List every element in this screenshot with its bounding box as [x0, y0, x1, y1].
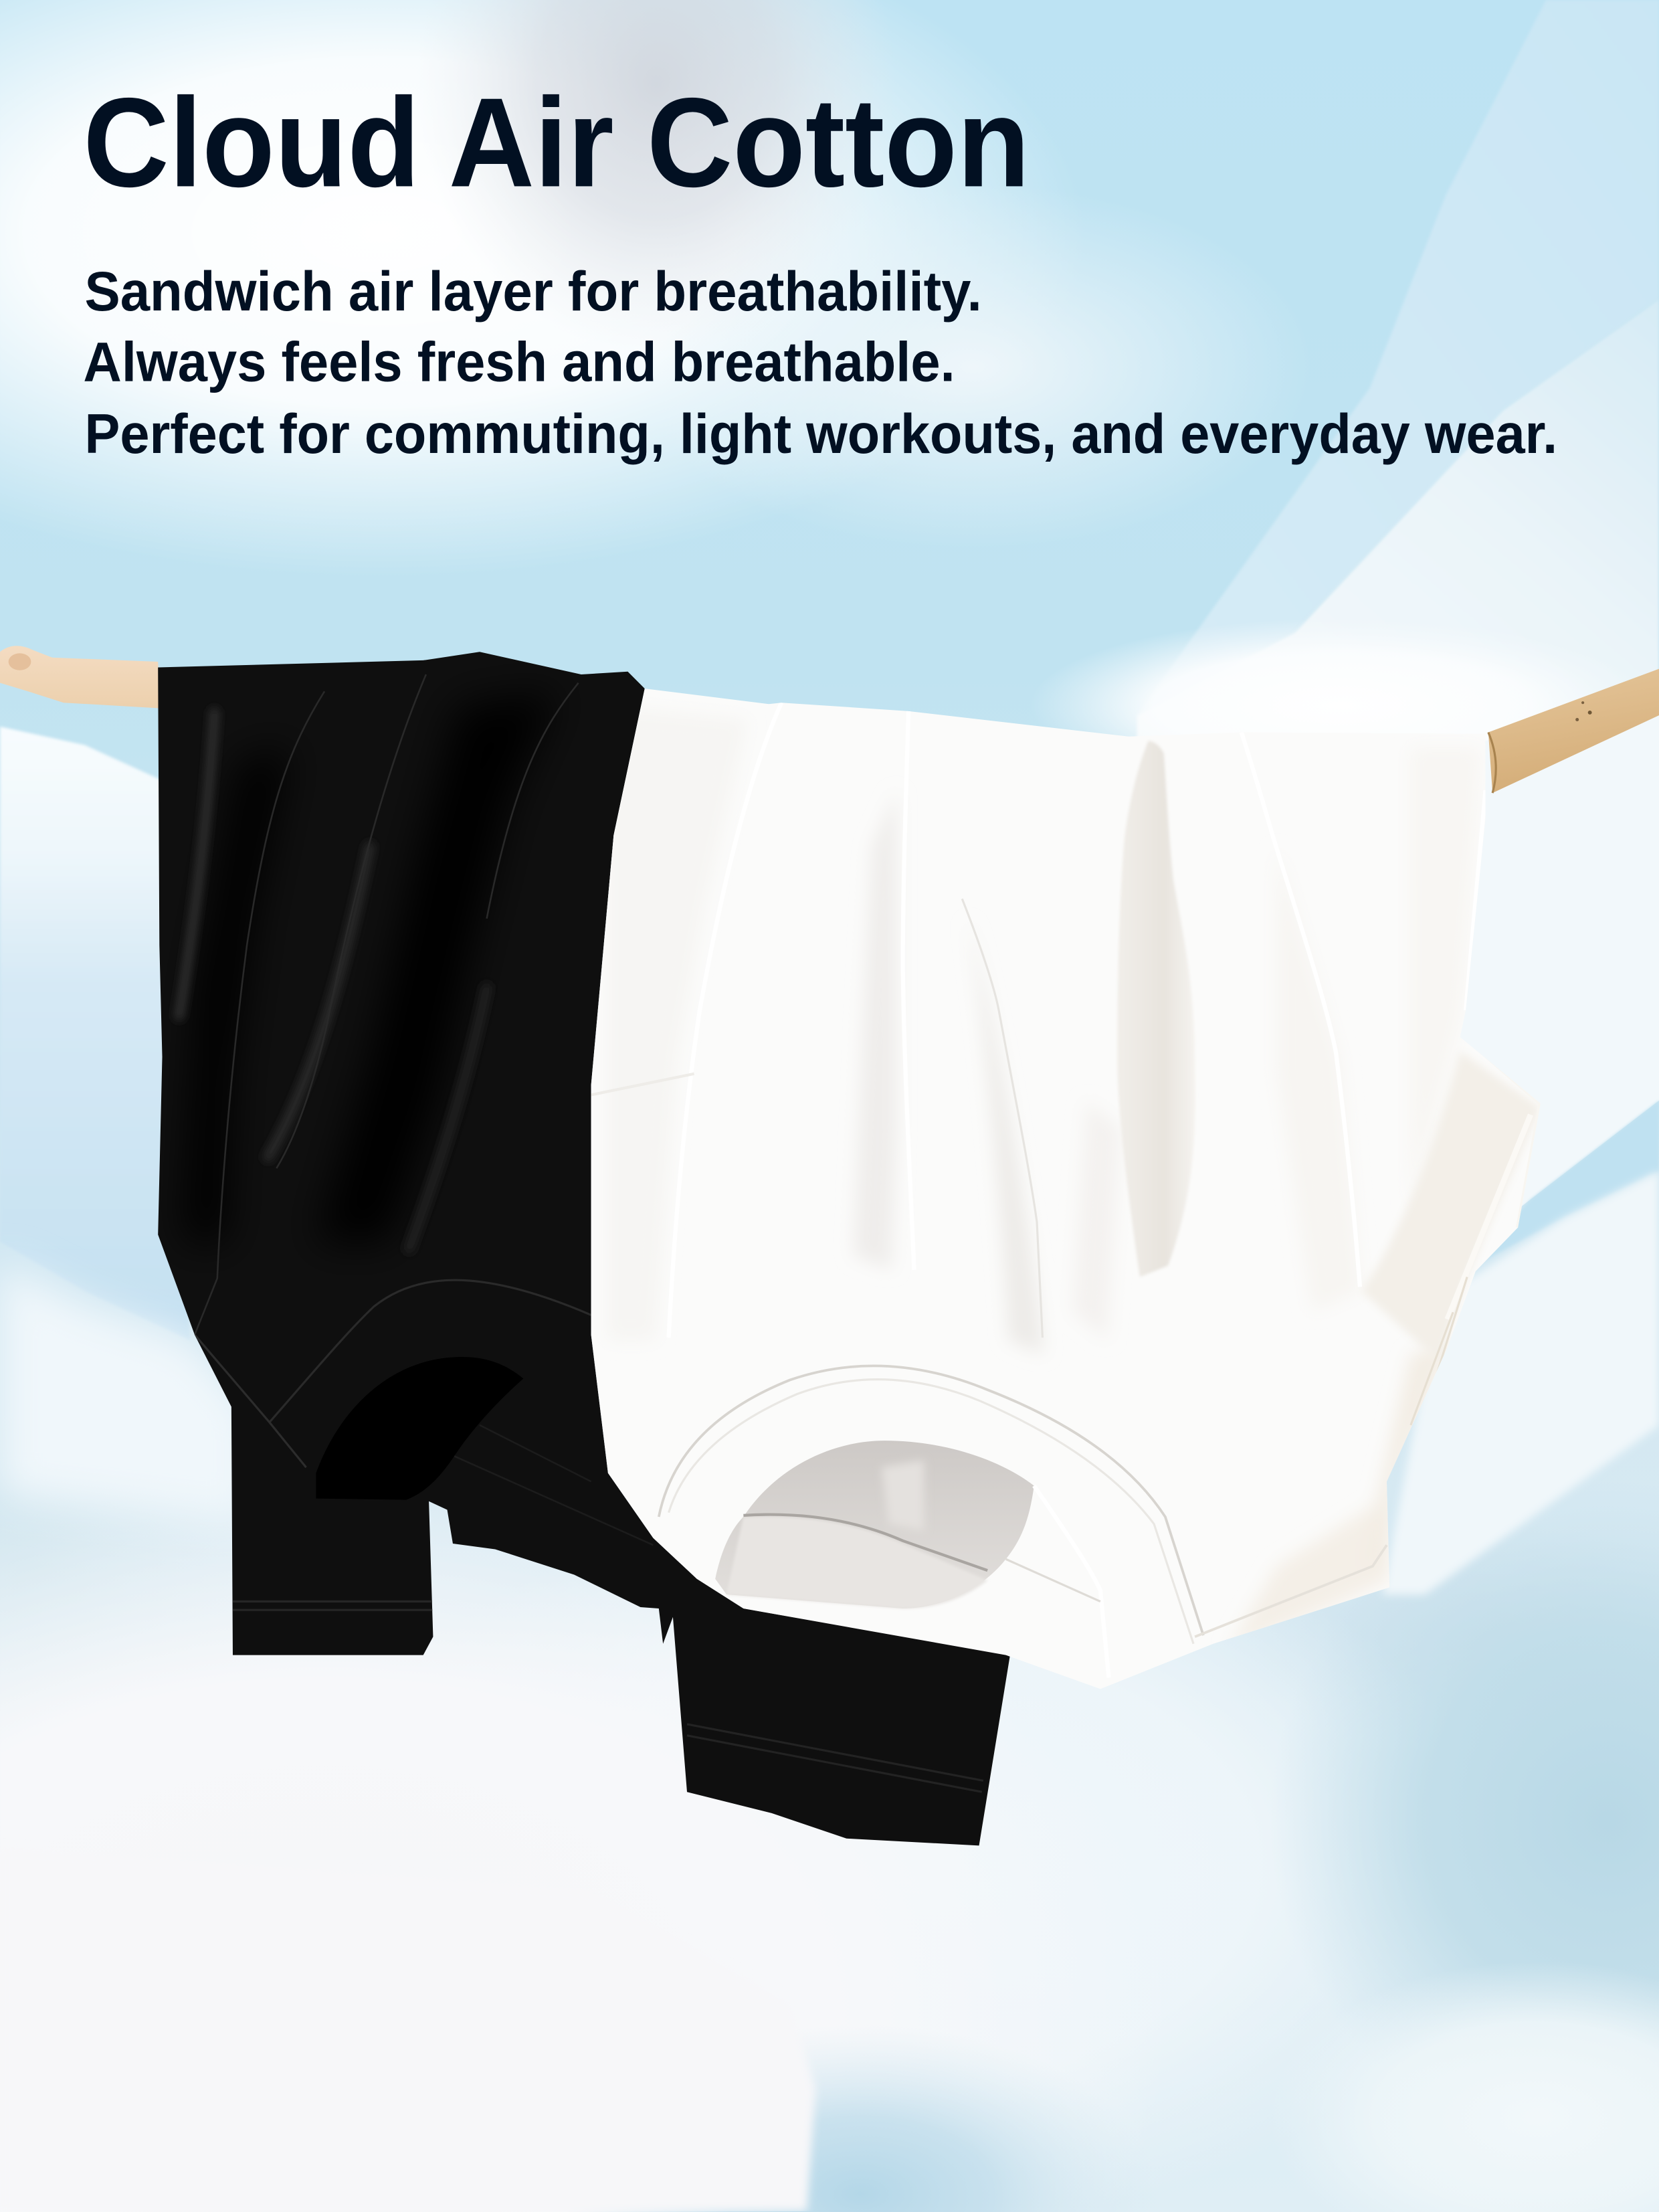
sleeve cuffs	[233, 1602, 433, 1610]
title: Cloud Air Cotton	[83, 72, 1030, 213]
black garment sheen	[179, 713, 487, 1249]
lower left cloud edge	[0, 1849, 815, 2211]
fabric left	[0, 727, 191, 1340]
black fold lines	[195, 674, 579, 1335]
white collar rib	[659, 1366, 1203, 1635]
fabric upper right	[1137, 0, 1659, 715]
description text: Perfect for commuting, light workouts, and everyday wear.	[85, 403, 1557, 465]
white neck opening	[715, 1441, 1034, 1608]
cream side flap	[1361, 1051, 1541, 1362]
stick right	[1488, 669, 1659, 793]
description text	[83, 260, 1557, 465]
description text: Always feels fresh and breathable.	[83, 331, 955, 393]
bright crease lines	[669, 703, 1486, 1338]
black collar rib	[270, 1280, 591, 1422]
black garment dark folds	[190, 703, 536, 1236]
white garment	[591, 688, 1541, 1689]
stick left	[0, 646, 161, 709]
fabric right of shirt	[1439, 714, 1659, 1270]
description text: Sandwich air layer for breathability.	[85, 260, 982, 322]
black collar opening	[316, 1357, 523, 1500]
black garment	[158, 652, 1010, 1845]
white garment soft pleats	[607, 705, 1481, 1651]
shoulder seam	[591, 1074, 694, 1095]
deep pleat	[1117, 741, 1195, 1277]
